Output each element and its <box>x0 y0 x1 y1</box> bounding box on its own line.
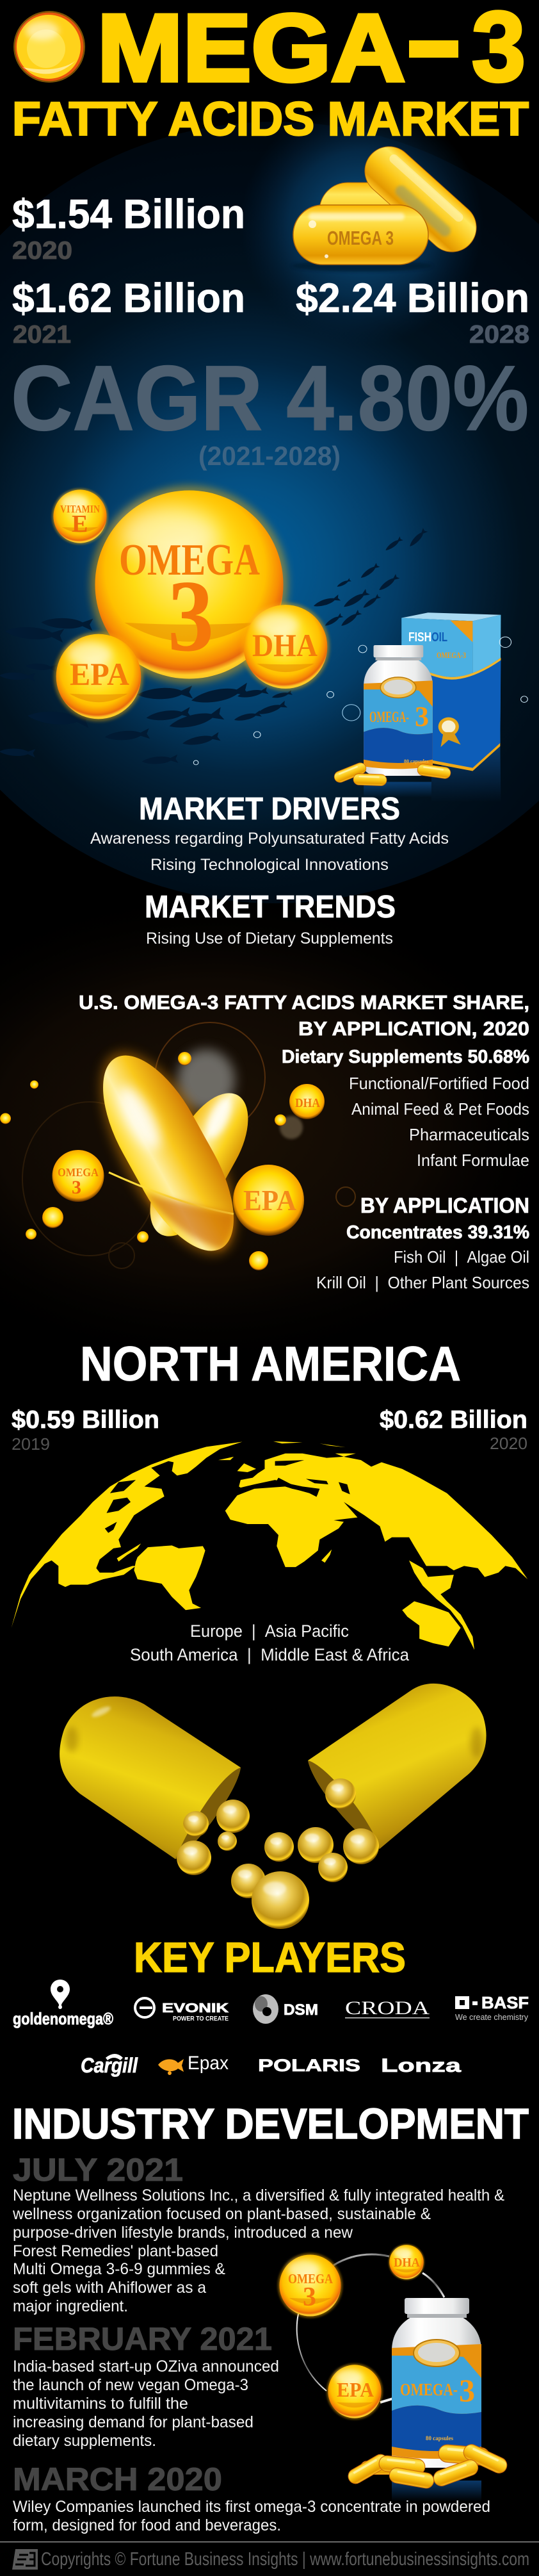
logo: DSM: DSM <box>284 2001 318 2019</box>
paragraph: July 2021: Neptune Wellness Solutions Inc., a diversified & fully integrated health & <box>13 2186 504 2204</box>
bubble: DHA: DHA <box>394 2256 421 2270</box>
box label: FISH <box>408 630 431 644</box>
bubble: Omega 3 <box>52 1150 104 1202</box>
logo: BASF <box>455 1993 529 2022</box>
panel: regional <box>12 1337 527 1664</box>
icon: big omega 3 bubble: 3 <box>168 559 214 673</box>
trend: Rising Use of Dietary Supplements <box>146 930 393 948</box>
year 2020: 2020 <box>12 237 72 265</box>
capsule label: OMEGA 3 <box>327 227 394 249</box>
panel: market share by application <box>79 991 529 1292</box>
warm glow behind market share panel <box>0 884 539 1371</box>
bubble: DHA: DHA <box>295 1096 320 1110</box>
paragraph: March 2020: Wiley Companies launched its first omega-3 concentrate in powdered <box>13 2498 490 2516</box>
paragraph: March 2020 <box>13 2498 490 2534</box>
heading: MARKET TRENDS <box>145 890 396 924</box>
bubble: EPA <box>326 2363 383 2420</box>
list of applications: Functional/Fortified Food <box>349 1074 529 1093</box>
bottle text: OMEGA- <box>400 2380 458 2399</box>
blue underwater glow <box>0 122 539 903</box>
value 2020: $1.54 Billion <box>12 191 245 237</box>
icon: fish oil bottle and box <box>193 612 527 802</box>
bubble: Omega 3: OMEGA <box>288 2271 334 2286</box>
icon: oil droplet <box>13 11 85 83</box>
heading: MARKET DRIVERS <box>139 792 400 826</box>
panel: market size <box>11 136 529 471</box>
world map <box>12 1441 527 1650</box>
logo: Evonik <box>135 1998 229 2022</box>
date: March 2020: MARCH 2020 <box>13 2461 222 2497</box>
bubble: DHA <box>289 1084 325 1119</box>
panel: market trends <box>145 890 396 948</box>
logo: Polaris: POLARIS <box>258 2056 360 2075</box>
panel: industry development <box>12 2100 529 2534</box>
paragraph: July 2021: Multi Omega 3-6-9 gummies & <box>13 2260 225 2278</box>
logo: Epax <box>158 2053 229 2075</box>
logo: Evonik: POWER TO CREATE <box>173 2015 229 2022</box>
logo: DSM <box>253 1994 318 2024</box>
icon: big omega 3 bubble: OMEGA <box>119 536 260 585</box>
icon: Fortune Business Insights logo <box>12 2549 38 2570</box>
panel: market share by application: Animal Feed & Pet Foods <box>351 1099 529 1119</box>
icon: DHA bubble <box>241 603 330 691</box>
by application heading: BY APPLICATION <box>360 1194 529 1217</box>
year 2019: 2019 <box>12 1434 50 1454</box>
year 2021: 2021 <box>13 321 71 349</box>
value 2019: $0.59 Billion <box>12 1406 159 1434</box>
panel: market share by application: BY APPLICATION, 2020 <box>298 1017 529 1040</box>
paragraph: July 2021: major ingredient. <box>13 2297 128 2315</box>
logo: Lonza: Lonza <box>381 2055 461 2076</box>
panel: regional: South America | Middle East & Africa <box>130 1645 410 1664</box>
bubble: Omega 3 <box>278 2253 342 2318</box>
icon: softgel capsules <box>292 136 487 272</box>
paragraph: February 2021: increasing demand for plant-based <box>13 2413 253 2431</box>
CAGR period: (2021-2028) <box>198 441 341 471</box>
bubble: EPA: EPA <box>337 2378 374 2401</box>
icon: fish oil bottle and box: OIL <box>431 630 447 644</box>
subtitle: FATTY ACIDS MARKET <box>12 92 529 145</box>
title <box>97 0 526 102</box>
bottle label: OMEGA- <box>369 709 409 726</box>
other regions: Europe | Asia Pacific <box>190 1621 349 1641</box>
logo: Croda: CRODA <box>345 1998 430 2019</box>
value 2021: $1.62 Billion <box>12 275 245 321</box>
paragraph: July 2021: wellness organization focused on plant-based, sustainable & <box>12 2205 431 2223</box>
concentrates share: Concentrates 39.31% <box>346 1222 529 1243</box>
paragraph: July 2021 <box>12 2186 504 2315</box>
icon: fish oil bottle and box: OMEGA-3 <box>437 650 466 660</box>
heading: NORTH AMERICA <box>80 1337 461 1391</box>
bubble: DHA <box>389 2244 424 2280</box>
panel: market share by application: Infant Formulae <box>417 1151 529 1170</box>
icon: vitamin E bubble <box>52 488 108 545</box>
icon: fish oil bottle and box: 3 <box>415 701 429 732</box>
logo: Epax: Epax <box>188 2053 229 2074</box>
panel: header <box>12 0 529 145</box>
list of sources: Fish Oil | Algae Oil <box>394 1247 529 1267</box>
bottle illustration: 3 <box>459 2372 475 2408</box>
paragraph: July 2021: purpose-driven lifestyle brands, introduced a new <box>13 2224 353 2242</box>
icon: big omega 3 bubble <box>90 486 288 684</box>
paragraph: July 2021: soft gels with Ahiflower as a <box>13 2279 206 2297</box>
icon: open capsule with oil drops <box>60 1684 487 1929</box>
logo: goldenomega <box>13 1980 113 2028</box>
bubble: Omega 3: 3 <box>72 1177 81 1198</box>
driver 1: Awareness regarding Polyunsaturated Fatty Acids <box>90 830 449 848</box>
icon: fish oil bottle and box: 80 capsules <box>404 759 428 764</box>
icon: DHA bubble: DHA <box>252 627 318 663</box>
dietary supplements share: Dietary Supplements 50.68% <box>282 1047 529 1067</box>
icon: golden capsules illustration <box>0 1022 355 1274</box>
bottle illustration: 80 capsules <box>426 2435 453 2441</box>
panel: market drivers <box>90 792 449 874</box>
heading: U.S. OMEGA-3 FATTY ACIDS MARKET SHARE, <box>79 991 529 1013</box>
bubble: EPA: EPA <box>243 1184 296 1217</box>
paragraph: February 2021: India-based start-up OZiva announced <box>13 2358 279 2375</box>
value 2020: $0.62 Billion <box>380 1406 527 1434</box>
icon: vitamin E bubble: VITAMIN <box>60 503 101 515</box>
logo: goldenomega: goldenomega® <box>13 2009 113 2028</box>
bubble: Omega 3: OMEGA <box>58 1166 99 1179</box>
paragraph: February 2021: the launch of new vegan Omega-3 <box>13 2376 248 2394</box>
panel: vitamin bubbles <box>52 486 330 721</box>
logo: Evonik: EVONIK <box>162 2001 229 2015</box>
logo: Cargill: Cargill <box>81 2054 138 2077</box>
panel: market share by application: Krill Oil | Other Plant Sources <box>316 1273 529 1292</box>
value 2028: $2.24 Billion <box>296 275 529 321</box>
bubble: EPA <box>233 1165 304 1236</box>
date: July 2021: JULY 2021 <box>13 2152 183 2188</box>
paragraph: July 2021: Forest Remedies' plant-based <box>13 2242 218 2260</box>
heading: KEY PLAYERS <box>134 1933 406 1981</box>
year 2028: 2028 <box>469 321 529 349</box>
driver 2: Rising Technological Innovations <box>150 856 389 874</box>
footer <box>12 2549 529 2570</box>
date: February 2021: FEBRUARY 2021 <box>13 2321 272 2357</box>
paragraph: March 2020: form, designed for food and beverages. <box>13 2516 281 2534</box>
glow behind capsules <box>240 103 483 346</box>
paragraph: February 2021: dietary supplements. <box>13 2432 156 2450</box>
panel: key players <box>13 1933 529 2077</box>
paragraph: February 2021: multivitamins to fulfill the <box>13 2395 188 2413</box>
paragraph: February 2021 <box>13 2358 279 2450</box>
icon: EPA bubble: EPA <box>70 656 129 692</box>
icon: vitamin E bubble: E <box>72 511 88 537</box>
logo: BASF: BASF <box>481 1993 529 2012</box>
bottle illustration <box>278 2244 510 2502</box>
panel: market share by application: Pharmaceuticals <box>409 1125 529 1144</box>
icon: EPA bubble <box>54 632 143 721</box>
year 2020: 2020 <box>490 1434 527 1453</box>
fish school <box>0 528 428 766</box>
logo: BASF: We create chemistry <box>455 2012 528 2022</box>
bubble: Omega 3: 3 <box>303 2283 316 2312</box>
